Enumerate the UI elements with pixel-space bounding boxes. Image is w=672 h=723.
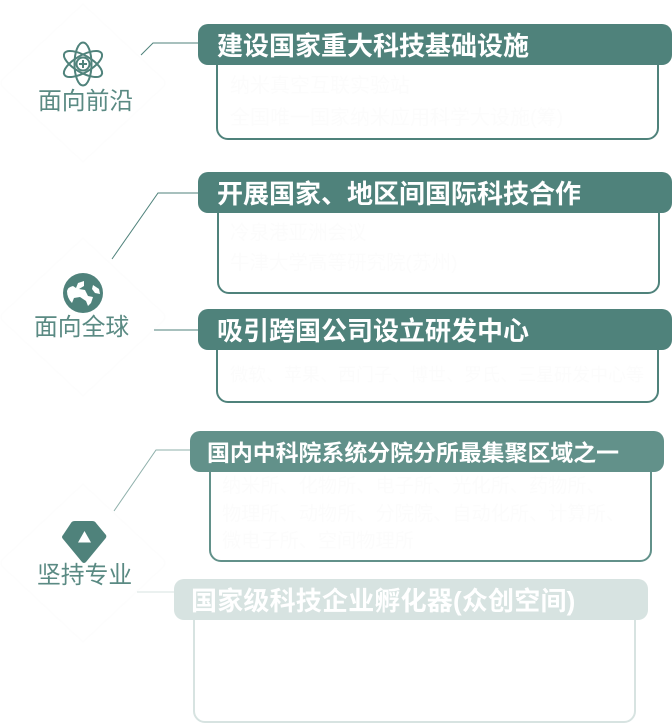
text: institutes list: 物理所、动物所、分院院、自动化所、计算所、 [222, 504, 625, 524]
text: institutes list [222, 473, 625, 556]
text: institutes list: 纳米所、化物所、电子所、光化所、药物所、 [222, 476, 606, 497]
panel: national science facilities [216, 60, 659, 140]
heading: CAS institutes [190, 431, 664, 472]
label: 坚持专业: 坚持专业 [37, 562, 132, 589]
heading: national science facilities [198, 24, 672, 65]
heading: international cooperation: 开展国家、地区间国际科技合作 [217, 179, 581, 209]
heading: multinational R&D centers: 吸引跨国公司设立研发中心 [217, 316, 529, 346]
panel: international cooperation [217, 208, 660, 294]
text: cooperation list: 牛津大学高等研究院(苏州) [230, 252, 458, 274]
label: 面向全球: 面向全球 [34, 314, 129, 341]
heading: national incubators: 国家级科技企业孵化器(众创空间) [191, 586, 576, 616]
text: institutes list: 微电子所、空间物理所 [222, 531, 414, 552]
text: facilities list: 纳米真空互联实验站 [230, 75, 410, 97]
panel: national incubators [193, 615, 636, 723]
heading: international cooperation [198, 172, 672, 213]
heading: national science facilities: 建设国家重大科技基础设施 [217, 31, 529, 61]
heading: CAS institutes: 国内中科院系统分院分所最集聚区域之一 [207, 440, 619, 466]
text: facilities list: 全国唯一国家纳米应用科学大设施(筹) [230, 107, 563, 129]
panel: multinational R&D centers [216, 345, 659, 403]
text: cooperation list: 冷泉港亚洲会议 [230, 222, 367, 244]
text: cooperation list [230, 218, 458, 278]
label: 面向前沿: 面向前沿 [38, 88, 133, 115]
panel: CAS institutes [209, 467, 652, 562]
text: facilities list [230, 70, 563, 134]
text: companies list: 微软、苹果、西门子、博世、罗氏、三星研发中心等 [230, 365, 644, 385]
heading: multinational R&D centers [198, 309, 672, 350]
heading: national incubators [174, 579, 648, 620]
